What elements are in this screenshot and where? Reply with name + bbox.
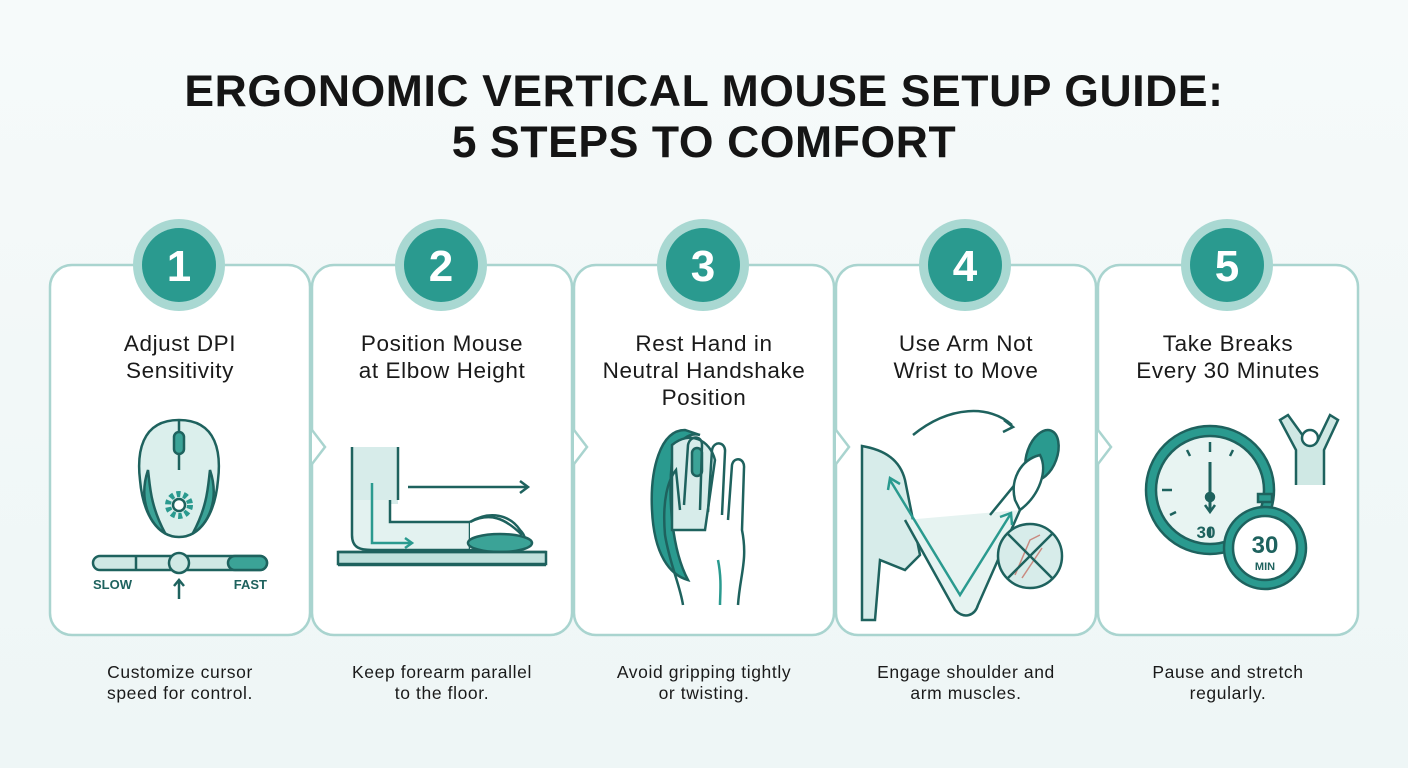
panel: step 3 (574, 219, 834, 635)
caption 1: Customize cursor (107, 662, 253, 682)
captions (107, 662, 1304, 703)
step 4 badge (919, 219, 1011, 311)
panel: step 1: SLOW (93, 577, 133, 592)
step 4 heading (894, 331, 1038, 383)
step 2 badge: 2 (429, 242, 453, 291)
step 1 badge: 1 (167, 242, 191, 291)
title: 5 STEPS TO COMFORT (452, 118, 956, 167)
step 3 heading: Neutral Handshake (603, 358, 805, 383)
arrow: chevron 3 to 4 (836, 430, 849, 464)
panel: step 1: FAST (234, 577, 267, 592)
icon: clock, stopwatch and stretching person: MIN (1255, 561, 1275, 573)
caption 5: regularly. (1190, 683, 1266, 703)
step 5 badge: 5 (1215, 242, 1239, 291)
step 1 heading: Adjust DPI (124, 331, 236, 356)
icon: arm at elbow height (338, 447, 546, 565)
step 3 badge (657, 219, 749, 311)
step 3 heading: Position (662, 385, 746, 410)
step 4 heading: Use Arm Not (899, 331, 1033, 356)
icon: mouse with gear and speed slider (93, 420, 267, 599)
step 5 heading: Every 30 Minutes (1136, 358, 1320, 383)
step 5 heading (1136, 331, 1320, 383)
step 2 badge (395, 219, 487, 311)
arrow: chevron 4 to 5 (1098, 430, 1111, 464)
step 1 heading (124, 331, 236, 383)
step 3 heading: Rest Hand in (635, 331, 773, 356)
icon: clock, stopwatch and stretching person (1146, 415, 1338, 589)
title (184, 67, 1224, 167)
arrow: chevron 1 to 2 (312, 430, 325, 464)
caption 3: or twisting. (659, 683, 749, 703)
icon: hand on vertical mouse (652, 430, 744, 605)
panel: step 5 (1098, 219, 1358, 635)
caption 2: Keep forearm parallel (352, 662, 532, 682)
step 1 heading: Sensitivity (126, 358, 234, 383)
step 2 heading (359, 331, 525, 383)
caption 4: Engage shoulder and (877, 662, 1055, 682)
caption 3: Avoid gripping tightly (617, 662, 791, 682)
icon: arm movement (862, 411, 1065, 620)
step 5 badge (1181, 219, 1273, 311)
panel: step 2 (312, 219, 572, 635)
caption 5: Pause and stretch (1152, 662, 1304, 682)
panel: step 1 (50, 219, 310, 635)
icon: clock, stopwatch and stretching person: 30 (1252, 532, 1278, 559)
icon: clock, stopwatch and stretching person: 30 (1197, 523, 1215, 542)
step 4 heading: Wrist to Move (894, 358, 1038, 383)
caption 1: speed for control. (107, 683, 253, 703)
arrow: chevron 2 to 3 (574, 430, 587, 464)
caption 2: to the floor. (395, 683, 489, 703)
title: ERGONOMIC VERTICAL MOUSE SETUP GUIDE: (184, 67, 1224, 116)
step 1 badge (133, 219, 225, 311)
step 3 badge: 3 (691, 242, 715, 291)
step 2 heading: at Elbow Height (359, 358, 525, 383)
step 4 badge: 4 (953, 242, 978, 291)
caption 4: arm muscles. (910, 683, 1022, 703)
step 5 heading: Take Breaks (1163, 331, 1293, 356)
step 3 heading (603, 331, 805, 410)
step 2 heading: Position Mouse (361, 331, 523, 356)
panel: step 4 (836, 219, 1096, 635)
